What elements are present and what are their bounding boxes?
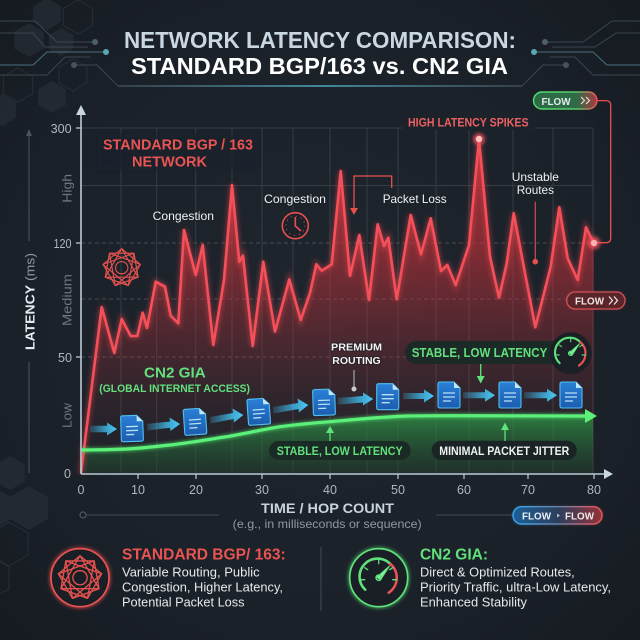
flow pill middle: FLOW <box>575 296 604 308</box>
legend icon: star in circle <box>51 549 109 607</box>
packet 4 <box>313 389 335 416</box>
y axis title <box>22 129 38 473</box>
packet 7 <box>499 382 521 408</box>
chart grid <box>81 128 593 473</box>
red latency line <box>81 139 594 473</box>
flow pill bottom: FLOW <box>565 510 594 522</box>
flow arrow 1 <box>90 422 117 436</box>
label: standard BGP network: STANDARD BGP / 163 <box>103 138 253 154</box>
legend description: Variable Routing, Public <box>122 564 260 580</box>
label: high latency spikes: HIGH LATENCY SPIKES <box>408 116 529 130</box>
data flow: packets and arrows <box>90 382 582 442</box>
flow arrow 7 <box>463 389 495 402</box>
x axis: 10 <box>131 483 145 497</box>
x axis title: TIME / HOP COUNT <box>261 500 394 516</box>
label: standard BGP network: NETWORK <box>132 154 208 170</box>
callout: premium routing <box>331 342 382 392</box>
legend description: Direct & Optimized Routes, <box>420 564 575 580</box>
y axis <box>51 105 86 481</box>
y axis: 0 <box>64 467 71 481</box>
x axis: 60 <box>457 483 471 497</box>
packet 6 <box>438 382 460 408</box>
packet 2 <box>183 408 207 435</box>
callout: unstable routes <box>512 170 559 265</box>
x axis title: (e.g., in milliseconds or sequence) <box>233 517 422 531</box>
callout: packet loss arrow <box>350 176 392 215</box>
flow arrow 2 <box>147 418 180 431</box>
red latency area <box>81 139 594 473</box>
y axis: 300 <box>51 122 72 136</box>
title <box>124 27 516 79</box>
header circuit lines left <box>0 21 118 86</box>
flow pill middle <box>567 292 625 309</box>
callout: stable low latency top <box>405 341 575 384</box>
x axis: 80 <box>587 483 601 497</box>
x axis: 20 <box>189 483 203 497</box>
x axis title <box>80 500 513 531</box>
legend description: Priority Traffic, ultra-Low Latency, <box>420 580 611 594</box>
flow arrow 3 <box>210 408 243 424</box>
decorative hexagon background <box>0 0 93 600</box>
x axis: 0 <box>78 483 85 497</box>
green latency area <box>81 416 593 473</box>
callout: stable low latency bottom <box>269 426 411 460</box>
green latency line with arrow <box>81 409 597 450</box>
callout: premium routing: ROUTING <box>332 355 381 367</box>
x axis: 50 <box>391 483 405 497</box>
legend heading: CN2 GIA: <box>420 546 488 564</box>
x axis: 30 <box>255 483 269 497</box>
label: CN2 GIA: CN2 GIA <box>144 364 206 382</box>
flow arrow 4 <box>273 398 308 414</box>
spike marker <box>473 133 485 145</box>
callout: premium routing: PREMIUM <box>331 342 382 354</box>
y axis: Low <box>60 402 74 428</box>
icon: speedometer small <box>550 332 592 374</box>
y axis: High <box>60 174 74 203</box>
x axis: 40 <box>323 483 337 497</box>
flow pill top with connector <box>534 92 611 250</box>
y axis: Medium <box>60 274 74 326</box>
callout: stable low latency bottom: STABLE, LOW LATENCY <box>277 444 403 458</box>
title: NETWORK LATENCY COMPARISON: <box>124 27 516 53</box>
red latency line glow <box>81 139 594 473</box>
y axis: 120 <box>54 237 72 251</box>
flow arrow 8 <box>524 389 557 402</box>
packet 3 <box>247 398 271 425</box>
label: CN2 GIA: (GLOBAL INTERNET ACCESS) <box>99 383 250 395</box>
y axis: 50 <box>58 351 72 365</box>
y axis title: LATENCY (ms) <box>22 253 38 350</box>
label: CN2 GIA <box>99 364 250 395</box>
packet 8 <box>560 382 582 408</box>
callout: minimal packet jitter: MINIMAL PACKET JITTER <box>439 444 570 458</box>
flow arrow 5 <box>338 392 373 406</box>
header circuit lines right <box>522 21 640 86</box>
callout: unstable routes: Routes <box>517 183 554 197</box>
packet 1 <box>121 415 143 442</box>
legend panel: standard BGP <box>51 546 286 610</box>
callout: congestion two: Congestion <box>264 192 326 206</box>
x axis: 70 <box>521 483 535 497</box>
flow pill bottom <box>513 507 602 524</box>
header underline <box>118 85 522 87</box>
callout: packet loss: Packet Loss <box>383 192 447 206</box>
callout: stable low latency top: STABLE, LOW LATENCY <box>412 346 548 360</box>
legend heading: STANDARD BGP/ 163: <box>122 546 286 564</box>
icon: network star <box>103 249 140 286</box>
callout: congestion one: Congestion <box>153 209 214 223</box>
legend panel: CN2 GIA <box>350 546 611 610</box>
legend description: Enhanced Stability <box>420 594 527 610</box>
label: standard BGP network <box>98 134 258 170</box>
legend description: Congestion, Higher Latency, <box>122 580 283 594</box>
x axis <box>78 469 613 497</box>
flow arrow 6 <box>403 390 434 402</box>
legend icon: gauge in circle <box>350 549 408 607</box>
packet 5 <box>377 384 399 410</box>
flow pill bottom: FLOW <box>522 510 551 522</box>
callout: minimal packet jitter <box>432 422 577 460</box>
legend description <box>420 564 611 610</box>
callout: unstable routes: Unstable <box>512 170 559 184</box>
chart <box>22 105 613 531</box>
title: STANDARD BGP/163 vs. CN2 GIA <box>131 53 508 79</box>
legend description: Potential Packet Loss <box>122 594 245 610</box>
icon: clock <box>282 213 308 239</box>
flow pill top with connector: FLOW <box>542 96 571 108</box>
legend description <box>122 564 283 610</box>
